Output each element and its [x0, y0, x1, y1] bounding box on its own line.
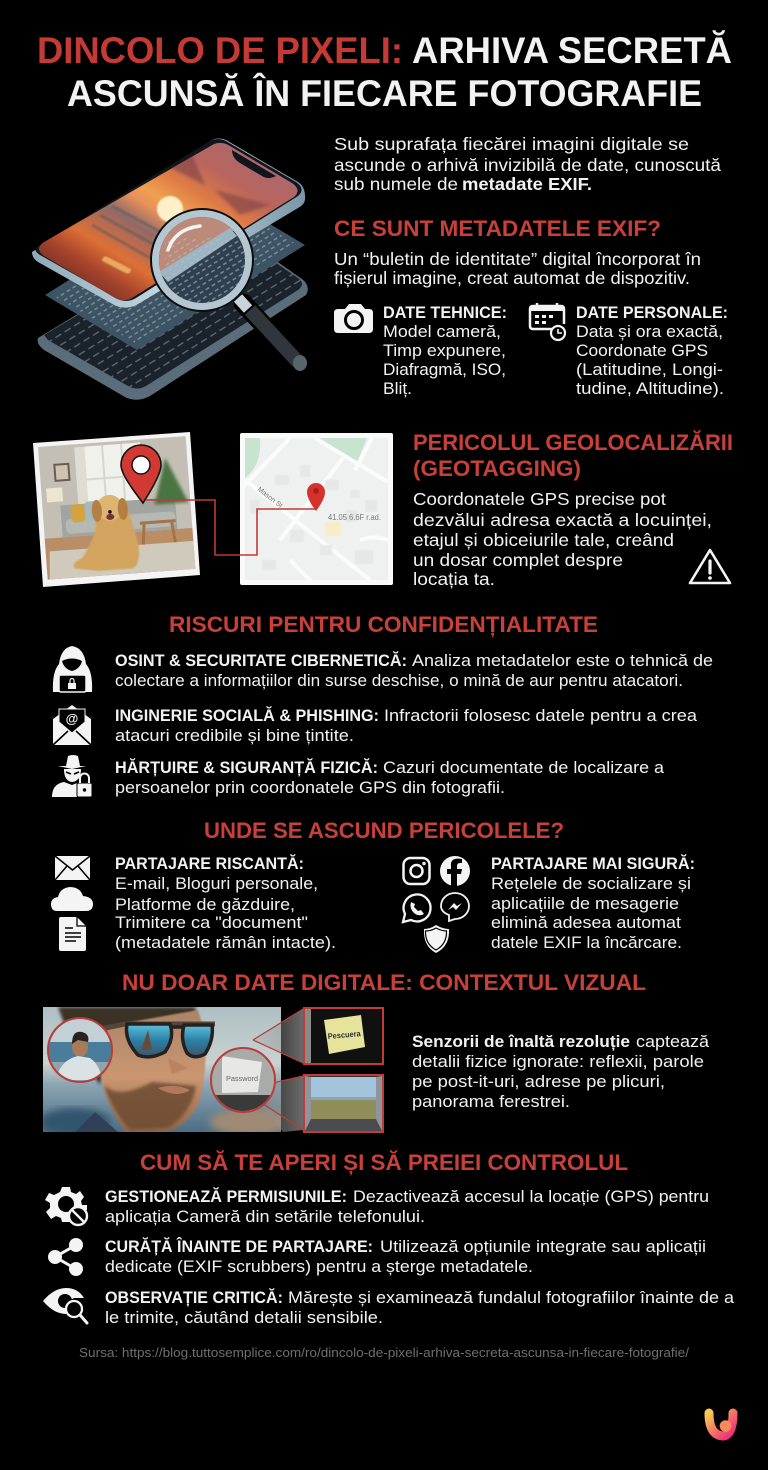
- middle data sheet: [45, 190, 305, 350]
- visual context text: panorama ferestrei.: [412, 1092, 570, 1111]
- visual context text: detalii fizice ignorate: reflexii, parole: [412, 1052, 704, 1071]
- heading: visual context: NU DOAR DATE DIGITALE: CONTEXTUL VIZUAL: [122, 970, 646, 995]
- intro text: Sub suprafața fiecărei imagini digitale se: [334, 134, 689, 154]
- tip: permissions: GESTIONEAZĂ PERMISIUNILE:: [105, 1187, 347, 1206]
- personal data: [576, 303, 728, 398]
- geolocation text: locația ta.: [413, 569, 495, 589]
- photo: dog in living room: [33, 432, 200, 587]
- EXIF definition: fișierul imagine, creat automat de dispozitiv.: [334, 268, 690, 288]
- geolocation text: un dosar complet despre: [413, 550, 623, 570]
- icon: WhatsApp: [403, 894, 431, 922]
- icons: risky sharing: [51, 856, 93, 951]
- inset: sticky note on monitor: [304, 1008, 383, 1064]
- technical data: Bliț.: [383, 379, 412, 398]
- risk: harassment: Cazuri documentate de localizare a: [383, 758, 665, 777]
- risky sharing text: [115, 854, 336, 952]
- personal data: Coordonate GPS: [576, 341, 708, 360]
- right circle: password note: [210, 1048, 276, 1113]
- icon: document: [59, 917, 86, 951]
- icon: Facebook: [440, 856, 470, 886]
- risky sharing text: Platforme de găzduire,: [115, 895, 295, 914]
- icon: phishing envelope: [53, 705, 91, 745]
- risk: OSINT: colectare a informațiilor din surse deschise, o mină de aur pentru atacatori.: [115, 671, 683, 690]
- photo: man in sunglasses with zoomed details: [40, 1007, 383, 1136]
- tip: permissions: aplicația Cameră din setările telefonului.: [105, 1207, 425, 1226]
- risk: harassment: HĂRȚUIRE & SIGURANȚĂ FIZICĂ:: [115, 758, 378, 777]
- geolocation text: Coordonatele GPS precise pot: [413, 489, 666, 509]
- geolocation text: etajul și obiceiurile tale, creând: [413, 530, 674, 550]
- safer sharing text: [491, 854, 695, 952]
- portrait: [40, 1007, 290, 1136]
- intro text: sub numele de: [334, 174, 458, 194]
- tip: critical observation: [105, 1288, 735, 1327]
- tip: clean before sharing: dedicate (EXIF scrubbers) pentru a șterge metadatele.: [105, 1257, 533, 1276]
- heading: how to protect yourself: CUM SĂ TE APERI ȘI SĂ PREIEI CONTROLUL: [140, 1150, 628, 1175]
- safer sharing text: PARTAJARE MAI SIGURĂ:: [491, 854, 695, 873]
- title: ARHIVA SECRETĂ: [412, 30, 732, 71]
- tip: clean before sharing: Utilizează opțiunile integrate sau aplicații: [380, 1237, 706, 1256]
- intro text: ascunde o arhivă invizibilă de date, cunoscută: [334, 155, 721, 175]
- safer sharing text: datele EXIF la încărcare.: [491, 933, 682, 952]
- icon: share: [48, 1238, 83, 1276]
- risky sharing text: PARTAJARE RISCANTĂ:: [115, 854, 304, 873]
- map: [240, 433, 393, 590]
- magnifying glass: [150, 208, 307, 371]
- geolocation text: [413, 489, 712, 589]
- risk: social engineering: [115, 706, 698, 745]
- tip: clean before sharing: CURĂȚĂ ÎNAINTE DE PARTAJARE:: [105, 1237, 373, 1256]
- risk: social engineering: INGINERIE SOCIALĂ & PHISHING:: [115, 706, 379, 725]
- heading: geolocation danger: PERICOLUL GEOLOCALIZĂRII: [413, 430, 733, 455]
- personal data: Data și ora exactă,: [576, 322, 723, 341]
- inset: sticky note on monitor: Pescuera: [327, 1029, 362, 1041]
- connector line from photo to map: [146, 500, 316, 555]
- risk: harassment: [115, 758, 665, 797]
- personal data: DATE PERSONALE:: [576, 303, 728, 322]
- icon: Messenger: [441, 893, 469, 921]
- title: [37, 30, 732, 114]
- tip: permissions: Dezactivează accesul la locație (GPS) pentru: [353, 1187, 709, 1206]
- EXIF definition: Un “buletin de identitate” digital încorporat în: [334, 249, 701, 269]
- zoom cones: [253, 1009, 303, 1063]
- map: Mason St: [256, 486, 283, 510]
- technical data: Model cameră,: [383, 322, 501, 341]
- map: 41.05 6.6F r.ad.: [328, 513, 381, 522]
- tip: critical observation: le trimite, căutând detalii sensibile.: [105, 1308, 383, 1327]
- visual context text: captează: [636, 1032, 710, 1051]
- icon: eye with magnifier: [43, 1288, 87, 1323]
- icon: calendar with clock: [530, 303, 565, 340]
- left circle: reflected person: [48, 1018, 112, 1082]
- logo: [709, 1413, 733, 1436]
- risk: social engineering: Infractorii folosesc datele pentru a crea: [384, 706, 698, 725]
- title: DINCOLO DE PIXELI:: [37, 30, 403, 71]
- geolocation text: dezvălui adresa exactă a locuinței,: [413, 510, 712, 530]
- heading: geolocation danger: (GEOTAGGING): [413, 456, 581, 481]
- EXIF definition: [334, 249, 701, 288]
- top phone with sunset photo: [32, 138, 306, 308]
- technical data: Diafragmă, ISO,: [383, 360, 506, 379]
- inset: window panorama: [304, 1075, 383, 1132]
- safer sharing text: elimină adesea automat: [491, 913, 681, 932]
- heading: what is EXIF: CE SUNT METADATELE EXIF?: [334, 216, 661, 241]
- title: ASCUNSĂ ÎN FIECARE FOTOGRAFIE: [67, 72, 702, 114]
- risk: harassment: persoanelor prin coordonatele GPS din fotografii.: [115, 778, 505, 797]
- intro text: metadate EXIF.: [462, 174, 592, 194]
- icon: gear with block sign: [45, 1187, 87, 1225]
- risk: OSINT: Analiza metadatelor este o tehnică de: [412, 651, 713, 670]
- visual context text: [412, 1032, 710, 1111]
- icon: spy with lock: [52, 755, 92, 797]
- visual context text: pe post-it-uri, adrese pe plicuri,: [412, 1072, 665, 1091]
- risky sharing text: (metadatele rămân intacte).: [115, 933, 336, 952]
- tip: critical observation: OBSERVAȚIE CRITICĂ:: [105, 1288, 283, 1307]
- safer sharing text: aplicațiile de mesagerie: [491, 894, 679, 913]
- icon: shield: [424, 925, 449, 953]
- bottom phone with raw data: [38, 225, 308, 400]
- heading: geolocation danger: [413, 430, 733, 481]
- icon: camera: [334, 304, 373, 333]
- risk: OSINT: [115, 651, 713, 690]
- heading: where dangers hide: UNDE SE ASCUND PERICOLELE?: [204, 818, 564, 843]
- heading: privacy risks: RISCURI PENTRU CONFIDENȚIALITATE: [169, 612, 598, 637]
- visual context text: Senzorii de înaltă rezoluție: [412, 1032, 630, 1051]
- icon: warning triangle: [690, 550, 730, 583]
- intro text: [334, 134, 721, 194]
- personal data: (Latitudine, Longi-: [576, 360, 723, 379]
- tip: clean before sharing: [105, 1237, 706, 1276]
- icon: envelope: [55, 856, 90, 880]
- right circle: password note: Password: [226, 1076, 258, 1083]
- technical data: Timp expunere,: [383, 341, 506, 360]
- technical data: [383, 303, 507, 398]
- icon: hooded hacker: [53, 646, 92, 692]
- source line: Sursa: https://blog.tuttosemplice.com/ro/dincolo-de-pixeli-arhiva-secreta-ascunsa-in-fiecare-fotografie/: [79, 1346, 690, 1360]
- tip: permissions: [105, 1187, 709, 1226]
- sunglasses: [95, 1024, 215, 1057]
- tip: critical observation: Mărește și examinează fundalul fotografiilor înainte de a: [288, 1288, 735, 1307]
- risky sharing text: Trimitere ca "document": [115, 913, 308, 932]
- risk: social engineering: atacuri credibile și bine țintite.: [115, 726, 354, 745]
- risky sharing text: E-mail, Bloguri personale,: [115, 874, 318, 893]
- icon: cloud: [51, 887, 93, 911]
- icon: Instagram: [404, 858, 430, 884]
- icons: safer sharing apps: [403, 856, 470, 953]
- icon: phishing envelope: @: [66, 711, 78, 726]
- location pin: [121, 445, 161, 503]
- safer sharing text: Rețelele de socializare și: [491, 874, 691, 893]
- technical data: DATE TEHNICE:: [383, 303, 507, 322]
- risk: OSINT: OSINT & SECURITATE CIBERNETICĂ:: [115, 651, 407, 670]
- illustration: phone, data layers and magnifying glass: [32, 138, 308, 400]
- personal data: tudine, Altitudine).: [576, 379, 724, 398]
- map pin: [307, 483, 325, 511]
